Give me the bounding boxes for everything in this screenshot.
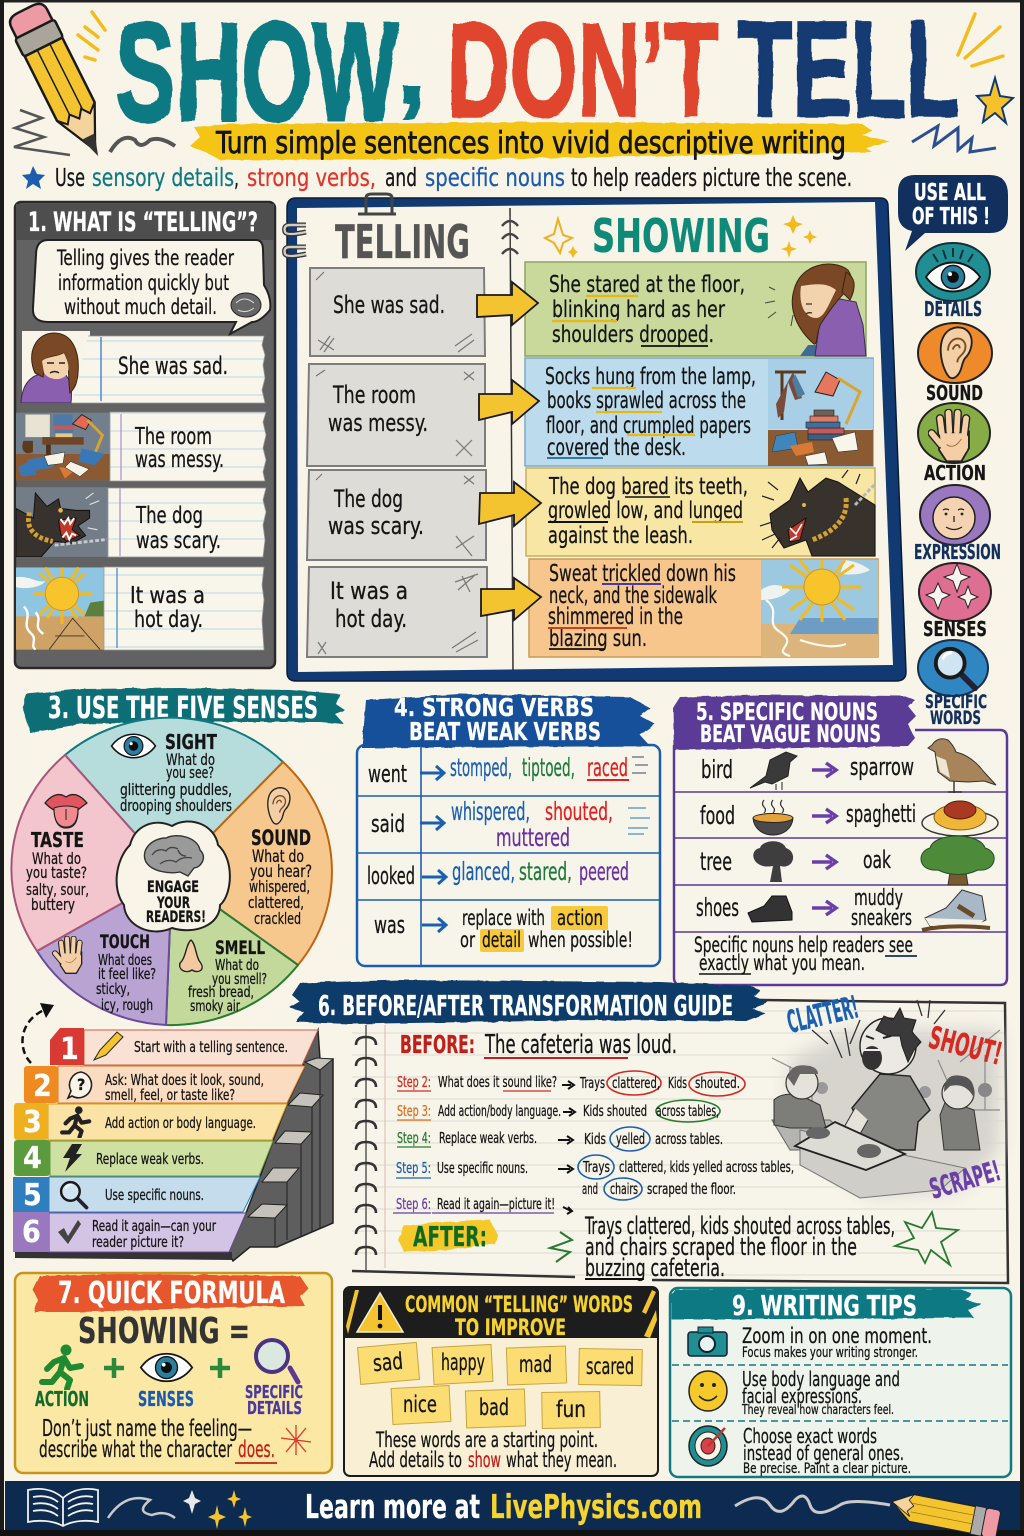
row: food to spaghetti: food <box>700 801 735 830</box>
illustration: noisy cafeteria sketch <box>772 1000 1000 1198</box>
step 5: 5 <box>23 1178 42 1213</box>
note: starting point: Add details to <box>369 1448 462 1472</box>
after sentence: and chairs scraped the floor in the <box>585 1233 857 1261</box>
step 2 line: Trays <box>579 1074 605 1092</box>
segment: sound: you hear? <box>250 862 312 882</box>
step 5 line: and <box>582 1180 598 1198</box>
binder clip <box>358 194 396 214</box>
row: said: whispered, <box>451 797 530 826</box>
footer bar <box>5 1481 1020 1536</box>
segment: smell <box>180 937 267 1015</box>
segment: smell: fresh bread, <box>188 983 254 1001</box>
telling text: was messy. <box>328 409 428 437</box>
telling text: It was a <box>330 577 408 605</box>
panel: 4. strong verbs <box>357 693 660 966</box>
showing card: hot day: shimmered in the <box>548 604 683 630</box>
staircase <box>15 1030 333 1261</box>
segment: touch: sticky, <box>96 980 130 998</box>
segment: taste: What do <box>32 849 81 868</box>
segment: smell: SMELL <box>215 937 265 959</box>
heading banner: writing tips: 9. WRITING TIPS <box>732 1289 917 1322</box>
doodle squiggle <box>735 1496 890 1512</box>
step 4: Replace weak verbs. <box>96 1150 204 1168</box>
tip: body language: Use body language and <box>742 1367 900 1391</box>
showing card: she was sad <box>525 262 866 356</box>
sticky notes <box>358 1342 642 1429</box>
heading banner: specific nouns: BEAT VAGUE NOUNS <box>700 720 881 748</box>
segment: sight <box>112 730 232 815</box>
decorative stars and rays: top right <box>912 14 1013 152</box>
step 3 line: across tables, <box>656 1102 719 1120</box>
segment: sound: clattered, <box>248 893 304 912</box>
formula: specific details <box>245 1340 303 1419</box>
sound word: clatter: CLATTER! <box>784 990 862 1041</box>
center: engage your readers: YOUR <box>156 893 190 912</box>
after sentence <box>550 1212 895 1282</box>
segment: sound: SOUND <box>251 826 311 850</box>
segment: sight: SIGHT <box>165 730 218 754</box>
step 2 line: Kids <box>668 1074 687 1092</box>
intro line: specific nouns <box>425 163 565 192</box>
heading banner: strong verbs: BEAT WEAK VERBS <box>409 717 601 746</box>
step 5 line: clattered, kids yelled across tables, <box>619 1158 794 1176</box>
step 6 <box>13 1212 246 1252</box>
panel: 3. use the five senses <box>11 688 345 1025</box>
step 4 line <box>397 1127 723 1151</box>
segment: touch <box>55 931 156 1014</box>
row: was <box>374 906 633 952</box>
note: starting point: what they mean. <box>506 1448 617 1472</box>
step 3 line <box>397 1100 720 1122</box>
segment: sight: drooping shoulders <box>120 796 232 815</box>
center: engage your readers: READERS! <box>146 907 206 926</box>
caption: specific nouns: exactly what you mean. <box>699 951 865 975</box>
speech bubble: definition: information quickly but <box>58 271 229 295</box>
note: describe what the character does: describe what the character <box>39 1437 232 1463</box>
telling text: was scary. <box>328 512 424 540</box>
step 2 line <box>397 1071 745 1096</box>
step 3 <box>14 1103 287 1140</box>
sidebar icon: action hand <box>918 403 990 485</box>
showing card: messy room: floor, and crumpled papers <box>546 413 751 439</box>
row: looked: glanced, <box>452 857 515 886</box>
row: tree to oak: oak <box>863 846 891 874</box>
formula: action: ACTION <box>35 1387 89 1411</box>
speech bubble: definition <box>33 240 270 334</box>
row: tree to oak <box>700 836 994 885</box>
telling text: She was sad. <box>333 291 445 319</box>
row: looked: looked <box>367 862 415 890</box>
step 5 line: Trays <box>582 1158 610 1176</box>
step 6 line: Step 6: <box>396 1195 431 1213</box>
row: she was sad: She was sad. <box>118 352 228 380</box>
sidebar icon: specific words magnifier <box>918 640 988 729</box>
step 5 line: Use specific nouns. <box>437 1159 528 1177</box>
segment: smell: you smell? <box>212 970 267 988</box>
subtitle banner: Turn simple sentences into vivid descriptive writing <box>215 126 846 161</box>
row: said: shouted, <box>545 797 613 826</box>
row: went <box>368 753 648 788</box>
callout: use all of this <box>898 175 1008 251</box>
step 4 line: Replace weak verbs. <box>439 1129 537 1147</box>
showing card: hot day: blazing sun. <box>549 626 647 652</box>
icon: green starburst <box>895 1212 958 1265</box>
before sentence: BEFORE: <box>400 1030 475 1059</box>
panel: 5. specific nouns <box>673 695 1007 985</box>
step 3 line: Add action/body language. <box>438 1102 561 1120</box>
title: DON’T <box>447 0 718 145</box>
segment: taste: you taste? <box>26 863 87 882</box>
step 3: 3 <box>23 1105 42 1140</box>
step 6: Read it again—can your <box>92 1217 216 1235</box>
row: went: tiptoed, <box>522 753 575 782</box>
sticky note words <box>372 1349 634 1423</box>
showing card: messy room: covered the desk. <box>547 435 686 461</box>
heading banner: specific nouns <box>673 695 916 750</box>
step 4: 4 <box>23 1141 42 1176</box>
segment: smell: What do <box>215 956 259 974</box>
sticky note words: fun <box>556 1397 586 1423</box>
formula: senses: SENSES <box>138 1387 194 1411</box>
intro line: sensory details <box>92 163 234 192</box>
segment: touch: it feel like? <box>98 965 156 983</box>
row: bird to sparrow: bird <box>701 755 733 784</box>
formula: specific details: DETAILS <box>247 1398 302 1419</box>
step 3: Add action or body language. <box>105 1114 256 1132</box>
step 2 line: clattered, <box>612 1074 660 1092</box>
segment: taste <box>26 795 89 914</box>
segment: sound: whispered, <box>249 877 310 896</box>
tip: exact words: Choose exact words <box>743 1424 877 1448</box>
step 6: reader picture it? <box>92 1233 184 1251</box>
footer link: LivePhysics.com <box>490 1487 702 1526</box>
tip: zoom in: Focus makes your writing stronger. <box>742 1345 918 1361</box>
row: food to spaghetti <box>700 800 998 836</box>
icon: pencil <box>5 0 175 166</box>
row: was: action <box>557 906 603 930</box>
row: shoes to muddy sneakers <box>696 886 990 931</box>
row: was: detail <box>482 928 521 952</box>
intro line: , <box>234 163 239 192</box>
intro line <box>22 163 852 192</box>
formula heading: SHOWING = <box>78 1311 250 1352</box>
caption: specific nouns: Specific nouns help readers see <box>694 933 913 957</box>
callout: use all of this: USE ALL <box>914 180 986 206</box>
intro line: and <box>385 163 417 192</box>
telling text: hot day. <box>335 605 407 633</box>
heading: showing with sparkles: SHOWING <box>592 209 770 263</box>
segment: sight: glittering puddles, <box>120 780 232 799</box>
row: went: stomped, <box>450 753 512 782</box>
row: was: replace with <box>462 906 545 930</box>
step 4 line: Kids <box>584 1130 606 1148</box>
tip: exact words: instead of general ones. <box>743 1441 904 1465</box>
showing card: scary dog <box>526 468 875 556</box>
step 2 line: What does it sound like? <box>438 1073 557 1091</box>
step 6: 6 <box>22 1215 41 1250</box>
center: engage your readers: ENGAGE <box>147 877 199 896</box>
row: tree to oak: tree <box>700 847 732 876</box>
step 5 line <box>396 1155 794 1200</box>
doodle and sparkles <box>108 1490 252 1529</box>
note: describe what the character does: Don’t just name the feeling— <box>42 1416 252 1442</box>
step 6 line <box>393 1195 572 1214</box>
title <box>115 0 960 150</box>
telling text: The dog <box>333 485 403 513</box>
row: it was a hot day: hot day. <box>134 607 203 633</box>
row: was: when possible! <box>528 928 633 952</box>
step 4 line: across tables. <box>655 1130 723 1148</box>
caption: specific nouns <box>694 933 917 975</box>
heading: telling: TELLING <box>335 215 470 269</box>
sense wheel segments <box>11 718 332 1025</box>
showing card: scary dog: growled low, and lunged <box>548 498 743 524</box>
row: looked <box>367 857 629 890</box>
row: bird to sparrow: sparrow <box>850 753 914 781</box>
step 5 line: chairs <box>610 1180 638 1198</box>
step 3 line: Kids shouted <box>583 1102 647 1120</box>
before sentence: The cafeteria was loud. <box>484 1030 677 1060</box>
sticky note words: mad <box>519 1352 552 1378</box>
sidebar icon: details eye: DETAILS <box>924 297 982 321</box>
segment: sound <box>248 788 312 928</box>
row: the room was messy: The room <box>134 424 212 450</box>
showing card: messy room: books sprawled across the <box>547 388 746 414</box>
tip: exact words <box>689 1424 911 1477</box>
panel: 6. before/after transformation guide <box>290 980 1008 1283</box>
showing card: hot day: Sweat trickled down his <box>549 561 736 587</box>
step 5 line: scraped the floor. <box>647 1180 736 1198</box>
row: food to spaghetti: spaghetti <box>846 800 916 828</box>
intro line: Use <box>55 163 85 192</box>
panel: 1. what is telling <box>15 202 275 668</box>
step 3 line: Step 3: <box>397 1102 431 1120</box>
segment: sight: you see? <box>166 763 214 782</box>
heading banner: five senses: 3. USE THE FIVE SENSES <box>48 691 318 726</box>
showing card: messy room <box>525 358 873 466</box>
speech bubble: definition: Telling gives the reader <box>56 246 234 270</box>
step 6 line: Read it again—picture it! <box>437 1195 555 1213</box>
showing card: messy room: Socks hung from the lamp, <box>545 364 756 390</box>
showing card: scary dog: The dog bared its teeth, <box>548 474 748 500</box>
sticky note words: nice <box>403 1392 437 1418</box>
segment: taste: buttery <box>31 895 75 914</box>
formula: specific details: SPECIFIC <box>245 1382 303 1403</box>
sticky note words: bad <box>479 1395 509 1421</box>
segment: touch: What does <box>98 951 152 969</box>
sticky note words: happy <box>441 1350 485 1376</box>
tip: zoom in <box>688 1324 932 1361</box>
showing card: she was sad: shoulders drooped. <box>552 322 714 348</box>
heading banner: specific nouns: 5. SPECIFIC NOUNS <box>696 698 878 726</box>
intro line: strong verbs, <box>247 163 376 192</box>
telling text: The room <box>332 381 416 409</box>
row: went: went <box>368 760 407 788</box>
sidebar icon: specific words magnifier: SPECIFIC <box>925 691 987 713</box>
step 2 <box>24 1066 305 1104</box>
step 2: 2 <box>33 1069 52 1104</box>
row: it was a hot day: It was a <box>130 583 205 609</box>
segment: smell: smoky air <box>190 997 240 1015</box>
step 4 line: Step 4: <box>397 1129 431 1147</box>
step 2: smell, feel, or taste like? <box>105 1086 235 1104</box>
callout: use all of this: OF THIS ! <box>912 204 990 230</box>
row: said: muttered <box>496 823 570 852</box>
showing card: she was sad: She stared at the floor, <box>549 272 745 298</box>
panel: 9. writing tips <box>670 1288 1011 1477</box>
step 5 <box>13 1177 260 1213</box>
step 1: 1 <box>60 1032 79 1067</box>
row: shoes to muddy sneakers: shoes <box>696 893 739 922</box>
step 5: Use specific nouns. <box>105 1186 204 1204</box>
note: describe what the character does: does. <box>238 1437 275 1463</box>
showing card: she was sad: blinking hard as her <box>552 297 725 323</box>
sidebar icon: details eye <box>916 243 990 321</box>
plus sign <box>104 1358 124 1378</box>
panel: step-by-step staircase <box>13 1003 333 1261</box>
row: bird to sparrow <box>701 739 996 793</box>
note: starting point: These words are a starting point. <box>375 1428 598 1452</box>
segment: sight: What do <box>166 750 215 769</box>
row: it was a hot day <box>16 567 264 650</box>
heading banner: quick formula: 7. QUICK FORMULA <box>58 1276 285 1311</box>
row: was: was <box>374 911 405 939</box>
tip: body language: facial expressions. <box>742 1384 862 1408</box>
tip: body language <box>689 1367 900 1418</box>
row: shoes to muddy sneakers: muddy <box>854 886 903 911</box>
step 2 line: shouted. <box>695 1074 740 1092</box>
sticky note words: sad <box>372 1349 404 1377</box>
intro line: to help readers picture the scene. <box>571 163 852 192</box>
showing card: hot day <box>529 559 878 657</box>
step 4 line: yelled <box>616 1130 645 1148</box>
step 1 <box>50 1028 318 1067</box>
step 2: Ask: What does it look, sound, <box>105 1071 264 1089</box>
segment: sound: crackled <box>254 909 301 928</box>
panel: 7. quick formula <box>15 1273 332 1473</box>
row: looked: stared, <box>519 857 572 886</box>
segment: touch: icy, rough <box>101 996 153 1014</box>
sidebar icon: senses sparkle: SENSES <box>923 617 987 641</box>
binder rings <box>285 216 518 258</box>
segment: taste: salty, sour, <box>26 880 89 899</box>
formula: senses <box>138 1354 194 1411</box>
after sentence: buzzing cafeteria. <box>585 1254 725 1282</box>
panel: common telling words <box>344 1287 658 1476</box>
sidebar icon: specific words magnifier: WORDS <box>930 707 981 729</box>
row: the dog was scary <box>16 487 266 557</box>
sidebar icon: sound ear: SOUND <box>926 381 983 405</box>
row: the room was messy: was messy. <box>135 447 224 473</box>
step 4 <box>14 1140 273 1176</box>
sidebar icon: action hand: ACTION <box>924 461 986 485</box>
telling cards <box>307 268 487 657</box>
footer text: Learn more at <box>305 1487 480 1526</box>
row: the dog was scary: was scary. <box>136 528 221 554</box>
speech bubble: definition: without much detail. <box>64 295 217 319</box>
icon: pencil in footer <box>889 1490 1001 1536</box>
spiral binding <box>356 1037 376 1255</box>
row: said <box>371 797 650 852</box>
row: the room was messy <box>16 412 266 481</box>
step 2: ? <box>77 1075 85 1094</box>
sidebar icon: sound ear <box>918 323 992 405</box>
row: said: said <box>371 810 405 838</box>
heading banner: strong verbs: 4. STRONG VERBS <box>394 693 594 722</box>
tip: zoom in: Zoom in on one moment. <box>742 1324 932 1348</box>
icon: open book <box>28 1489 98 1526</box>
row: the dog was scary: The dog <box>135 503 203 529</box>
formula: action <box>35 1344 89 1411</box>
heading banner: transformation guide: 6. BEFORE/AFTER TRANSFORMATION GUIDE <box>318 989 733 1022</box>
step 5 line: Step 5: <box>396 1159 431 1177</box>
sidebar icon: expression face <box>914 485 1001 564</box>
heading banner: five senses <box>22 688 345 733</box>
sticky note words: scared <box>586 1354 634 1380</box>
note: describe what the character does <box>39 1416 311 1463</box>
segment: touch: TOUCH <box>100 931 150 953</box>
header with hazard stripes <box>344 1287 658 1341</box>
header with hazard stripes: TO IMPROVE <box>455 1316 566 1341</box>
heading banner: strong verbs <box>362 693 655 748</box>
step 2 line: Step 2: <box>397 1073 431 1091</box>
telling text <box>328 291 445 633</box>
title: , <box>398 12 425 124</box>
row: she was sad <box>21 331 265 403</box>
segment: taste: TASTE <box>31 828 84 852</box>
heading: what is telling: 1. WHAT IS “TELLING”? <box>28 207 258 238</box>
before sentence <box>400 1030 677 1060</box>
tip: exact words: Be precise. Paint a clear picture. <box>743 1461 911 1477</box>
tip: body language: They reveal how characters feel. <box>741 1403 894 1418</box>
plus sign <box>210 1358 230 1378</box>
arrows: telling to showing <box>477 282 541 620</box>
row: looked: peered <box>579 857 629 886</box>
row: was: or <box>460 928 475 952</box>
showing card: scary dog: against the leash. <box>548 523 693 549</box>
panel: telling vs showing notebook <box>285 194 906 681</box>
after label: AFTER: <box>413 1220 487 1253</box>
step 1: Start with a telling sentence. <box>134 1038 288 1056</box>
showing card: hot day: neck, and the sidewalk <box>549 583 717 609</box>
row: went: raced <box>587 753 628 782</box>
note: starting point: show <box>468 1448 501 1472</box>
header with hazard stripes: COMMON “TELLING” WORDS <box>405 1293 633 1318</box>
heading banner: transformation guide <box>290 980 768 1024</box>
sidebar icon: senses sparkle <box>919 563 991 641</box>
center: engage your readers <box>117 821 230 931</box>
segment: sound: What do <box>252 847 304 867</box>
note: starting point <box>369 1428 617 1472</box>
row: shoes to muddy sneakers: sneakers <box>851 906 912 931</box>
dashed arrow: loop back to top <box>22 1003 54 1063</box>
